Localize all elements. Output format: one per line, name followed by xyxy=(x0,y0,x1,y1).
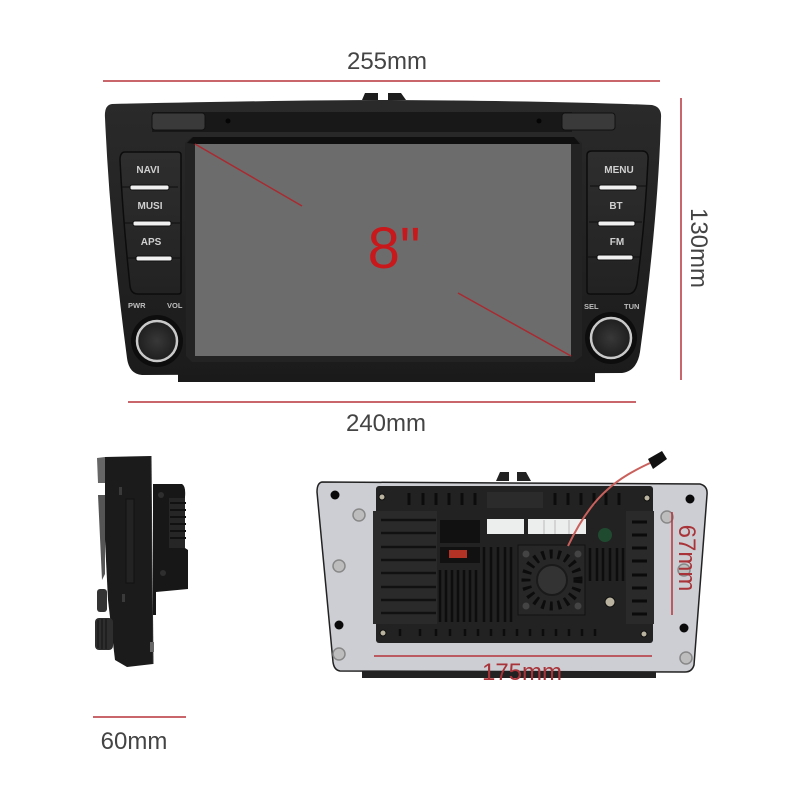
lower fins xyxy=(440,547,511,622)
plate mounting holes xyxy=(330,490,694,632)
knob labels: PWR xyxy=(128,301,146,310)
front view of head unit xyxy=(105,93,661,382)
dimension: 60mm depth: 60mm xyxy=(101,728,167,755)
top vents xyxy=(409,493,619,505)
chassis xyxy=(376,486,653,643)
screen bezel xyxy=(185,137,582,362)
right vents xyxy=(632,522,647,614)
bottom vents xyxy=(400,629,595,636)
right button panel: MENU xyxy=(604,165,634,176)
right button panel: FM xyxy=(610,237,624,248)
rear bottom strip xyxy=(362,670,656,678)
corner screws xyxy=(379,494,650,637)
disc slot band xyxy=(152,112,572,132)
left button panel: APS xyxy=(141,237,162,248)
dimension: 175mm width: 175mm xyxy=(482,659,562,686)
left knob xyxy=(131,315,183,367)
dimension: 255mm width: 255mm xyxy=(347,48,427,75)
plate screws xyxy=(333,509,692,664)
dimension: 130mm height: 130mm xyxy=(685,208,712,288)
dimension: 240mm width: 240mm xyxy=(346,410,426,437)
right slot cover xyxy=(562,113,615,130)
screen diagonal callout: 8 inch: 8" xyxy=(368,216,420,281)
dimension: 67mm height xyxy=(672,512,700,615)
rear mounting tabs xyxy=(496,472,531,481)
screen xyxy=(195,144,571,356)
side view knobs xyxy=(97,589,107,612)
knob labels: TUN xyxy=(624,302,639,311)
knob labels: SEL xyxy=(584,302,599,311)
bottom strip xyxy=(178,368,595,382)
chassis screw xyxy=(605,597,615,607)
dimension: 67mm height: 67mm xyxy=(673,525,700,591)
red wire and plug xyxy=(568,451,667,546)
left fins xyxy=(381,520,436,613)
right button panel: BT xyxy=(609,201,623,212)
left slot cover xyxy=(152,113,205,130)
metal plate xyxy=(317,482,707,672)
black connector xyxy=(440,520,480,543)
left button panel: NAVI xyxy=(136,165,160,176)
rear view of head unit xyxy=(317,451,707,678)
slot pinholes xyxy=(226,118,230,124)
housing xyxy=(105,100,661,375)
fan grille xyxy=(518,545,585,615)
right button panel xyxy=(587,151,648,294)
screen diagonal callout: 8 inch xyxy=(195,144,571,356)
left button panel: MUSI xyxy=(138,201,163,212)
mounting tabs xyxy=(362,93,406,100)
red fuse xyxy=(440,547,480,563)
knob labels: VOL xyxy=(167,301,183,310)
dimension: 60mm depth xyxy=(93,717,186,755)
side view of head unit xyxy=(95,456,188,667)
knob labels xyxy=(128,301,639,311)
white connectors xyxy=(487,519,524,534)
right knob xyxy=(585,312,637,364)
green indicator xyxy=(598,528,612,542)
left button panel xyxy=(120,152,181,294)
